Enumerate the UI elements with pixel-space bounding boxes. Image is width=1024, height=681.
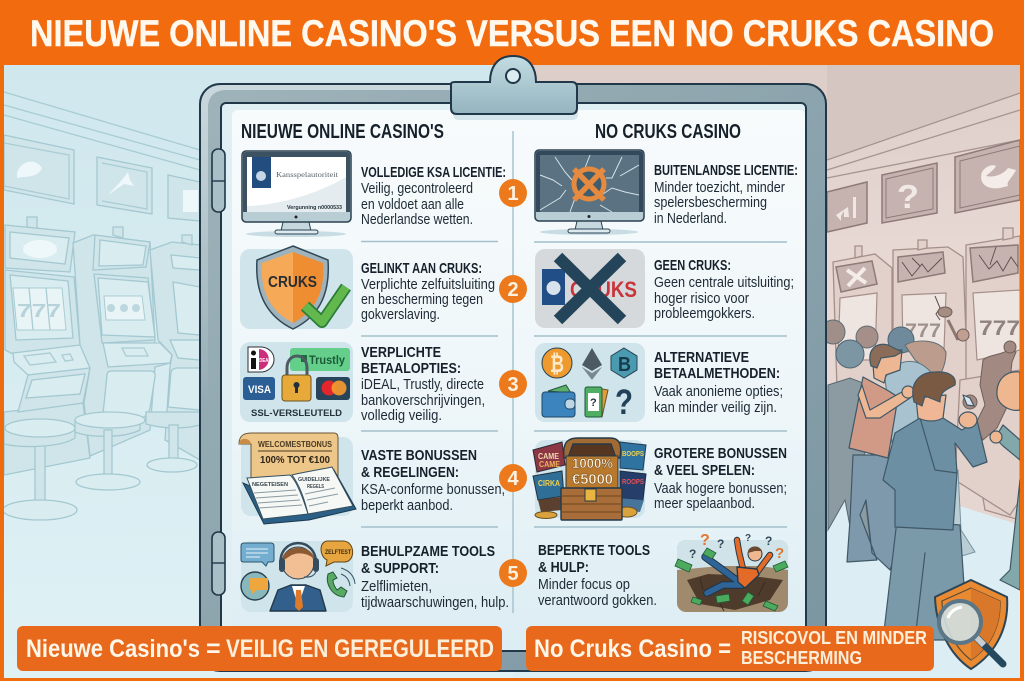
text: beperkte tools: BEPERKTE TOOLS [538, 542, 650, 559]
text: buitenlandse licentie: in Nederland. [654, 210, 727, 227]
icon: person falling in hole with money: ? [775, 545, 784, 562]
text: vaste bonussen: VASTE BONUSSEN [361, 447, 477, 464]
number badges: 4 [507, 468, 519, 490]
icon: bonus scroll and rule book [239, 433, 356, 524]
callout: veilig en gereguleerd: VEILIG EN GEREGULEERD [226, 635, 494, 663]
text: volledige KSA licentie: Nederlandse wetten. [361, 211, 473, 228]
background people [821, 307, 1016, 556]
callout: veilig en gereguleerd [17, 626, 502, 671]
icon: treasure chest with game cards: CIRKA [538, 479, 560, 488]
slot machines right: 777 [905, 321, 941, 342]
number badges: 2 [507, 279, 519, 301]
text: gelinkt aan cruks: gokverslaving. [361, 306, 440, 323]
icon: crypto and alternative payments [535, 343, 645, 422]
callout: risicovol en minder bescherming: No Cruks Casino = [534, 635, 731, 663]
icon: treasure chest with game cards: BOOPS [622, 451, 644, 458]
slot machine 1: 777 [17, 301, 61, 321]
hinges [212, 149, 225, 595]
text: grotere bonussen: GROTERE BONUSSEN [654, 445, 787, 462]
text: verplichte betaalopties: BETAALOPTIES: [361, 360, 461, 377]
icon: support agent [241, 541, 355, 612]
callout: risicovol en minder bescherming: BESCHERMING [741, 647, 862, 668]
icon: person falling in hole with money: ? [717, 537, 724, 551]
icon: person falling in hole with money: ? [689, 547, 696, 561]
slot machine 2 [73, 227, 172, 490]
crowd [821, 307, 1020, 640]
icon: payment options with lock: Trustly [309, 355, 346, 367]
icon: KSA monitor [242, 151, 351, 237]
icon: bonus scroll and rule book: 100% TOT €100 [260, 454, 330, 466]
icon: treasure chest with game cards: CAME [539, 460, 561, 469]
text: volledige KSA licentie [361, 164, 506, 228]
text: vaste bonussen: & REGELINGEN: [361, 464, 459, 481]
icon: treasure chest with game cards [533, 438, 646, 520]
text: alternatieve betaalmethoden: Vaak anonieme opties; [654, 383, 783, 400]
text: geen cruks: probleemgokkers. [654, 305, 755, 322]
text: verplichte betaalopties: volledig veilig. [361, 407, 442, 424]
text: volledige KSA licentie: en voldoet aan alle [361, 196, 464, 213]
man in salmon shirt [847, 344, 914, 570]
text: volledige KSA licentie: Veilig, gecontroleerd [361, 180, 473, 197]
slot machines right [833, 228, 1020, 520]
slot machines right: 777 [979, 317, 1020, 340]
panel: regulated casino background [0, 60, 520, 681]
text: gelinkt aan cruks [361, 260, 495, 323]
icon: cracked monitor [535, 150, 644, 235]
text: geen cruks: Geen centrale uitsluiting; [654, 274, 794, 291]
slot machine 3 [146, 235, 200, 472]
text: behulpzame tools: BEHULPZAME TOOLS [361, 543, 495, 560]
text: buitenlandse licentie: BUITENLANDSE LICENTIE: [654, 162, 798, 179]
icon: person falling in hole with money [675, 532, 788, 612]
text: verplichte betaalopties: iDEAL, Trustly, directe [361, 376, 484, 393]
text: gelinkt aan cruks: GELINKT AAN CRUKS: [361, 260, 482, 277]
icon: treasure chest with game cards: CAME [538, 452, 560, 461]
number badges: 5 [507, 563, 519, 585]
icon: crypto and alternative payments: ₿ [550, 351, 564, 378]
text: buitenlandse licentie [654, 162, 798, 227]
woman at right [990, 372, 1020, 590]
text: behulpzame tools: & SUPPORT: [361, 560, 439, 577]
text: behulpzame tools: Zelflimieten, [361, 578, 432, 595]
icon: KSA monitor: Vergunning n0000533 [287, 205, 342, 211]
text: verplichte betaalopties: bankoverschrijvingen, [361, 392, 485, 409]
wall frames left [4, 135, 200, 221]
text: vaste bonussen [361, 447, 505, 514]
text: vaste bonussen: KSA-conforme bonussen, [361, 481, 505, 498]
icon: treasure chest with game cards: ROOPS [622, 479, 644, 486]
text: geen cruks [654, 257, 794, 322]
text: grotere bonussen: meer spelaanbod. [654, 495, 755, 512]
callout: veilig en gereguleerd: Nieuwe Casino's [26, 635, 200, 663]
panel: no cruks casino background [514, 60, 1020, 681]
icon: payment options with lock [240, 342, 353, 422]
icon: payment options with lock: VISA [248, 384, 271, 396]
text: alternatieve betaalmethoden [654, 349, 783, 416]
icon: shield with magnifying glass [935, 580, 1007, 669]
icon: bonus scroll and rule book: REGELS [307, 484, 325, 490]
icon: crossed out cruks: CRUKS [570, 277, 637, 302]
text: grotere bonussen: & VEEL SPELEN: [654, 462, 755, 479]
text: gelinkt aan cruks: Verplichte zelfuitsluiting [361, 276, 495, 293]
text: gelinkt aan cruks: en bescherming tegen [361, 291, 483, 308]
text: grotere bonussen: Vaak hogere bonussen; [654, 480, 787, 497]
wall frames right: ? [897, 178, 919, 215]
clip [451, 56, 577, 114]
text: buitenlandse licentie: spelersbescherming [654, 194, 767, 211]
callout: risicovol en minder bescherming: RISICOVOL EN MINDER [741, 627, 927, 648]
icon: CRUKS shield with check [240, 246, 353, 329]
text: buitenlandse licentie: Minder toezicht, minder [654, 179, 785, 196]
callout: risicovol en minder bescherming [526, 626, 934, 671]
text: verplichte betaalopties: VERPLICHTE [361, 344, 441, 361]
number badges: 3 [507, 374, 519, 396]
icon: person falling in hole with money: ? [765, 534, 772, 548]
text: vaste bonussen: beperkt aanbod. [361, 497, 453, 514]
icon: crypto and alternative payments: ? [615, 383, 633, 422]
icon: person falling in hole with money: ? [745, 533, 751, 544]
number badges: 1 [507, 183, 519, 205]
text: beperkte tools: Minder focus op [538, 576, 630, 593]
wall frames right [827, 140, 1020, 232]
floor [514, 462, 1020, 681]
number badges [499, 179, 527, 587]
text: alternatieve betaalmethoden: kan minder veilig zijn. [654, 399, 777, 416]
text: volledige KSA licentie: VOLLEDIGE KSA LICENTIE: [361, 164, 506, 181]
icon: bonus scroll and rule book: NEGETEISEN [252, 482, 288, 488]
text: verplichte betaalopties [361, 344, 485, 424]
clipboard [200, 56, 826, 671]
text: alternatieve betaalmethoden: ALTERNATIEVE [654, 349, 749, 366]
heading: no cruks casino: NO CRUKS CASINO [595, 121, 741, 143]
text: beperkte tools: verantwoord gokken. [538, 592, 657, 609]
text: geen cruks: GEEN CRUKS: [654, 257, 731, 274]
title banner [0, 0, 1024, 65]
man in blue jacket [883, 372, 987, 640]
icon: CRUKS shield with check: CRUKS [268, 274, 317, 291]
icon: payment options with lock: SSL-VERSLEUTELD [251, 408, 342, 419]
icon: bonus scroll and rule book: GUIDELIJKE [298, 477, 331, 483]
paper sheet [221, 103, 806, 651]
icon: person falling in hole with money: ? [700, 532, 710, 549]
icon: bonus scroll and rule book: WELCOMESTBONUS [258, 439, 332, 449]
icon: payment options with lock: iDEAL [258, 358, 271, 364]
text: alternatieve betaalmethoden: BETAALMETHODEN: [654, 365, 780, 382]
icon: treasure chest with game cards: €5000 [572, 472, 613, 488]
text: geen cruks: hoger risico voor [654, 290, 749, 307]
heading: nieuwe online casino's: NIEUWE ONLINE CASINO'S [241, 121, 444, 143]
icon: crypto and alternative payments: B [618, 354, 631, 376]
icon: treasure chest with game cards: 1000% [572, 455, 614, 471]
column divider and rules [361, 131, 787, 613]
icon: crypto and alternative payments: ? [590, 397, 597, 409]
text: behulpzame tools: tijdwaarschuwingen, hulp. [361, 594, 509, 611]
text: behulpzame tools [361, 543, 509, 611]
callout: veilig en gereguleerd: = [206, 635, 221, 663]
icon: crossed out cruks [535, 249, 645, 328]
icon: support agent: ZELFTEST [325, 550, 351, 556]
text: beperkte tools: & HULP: [538, 559, 589, 576]
slot machine 1 [3, 217, 99, 520]
clipboard frame [200, 84, 826, 671]
icon: KSA monitor: Kansspelautoriteit [276, 170, 339, 179]
text: beperkte tools [538, 542, 657, 609]
text: grotere bonussen [654, 445, 787, 512]
